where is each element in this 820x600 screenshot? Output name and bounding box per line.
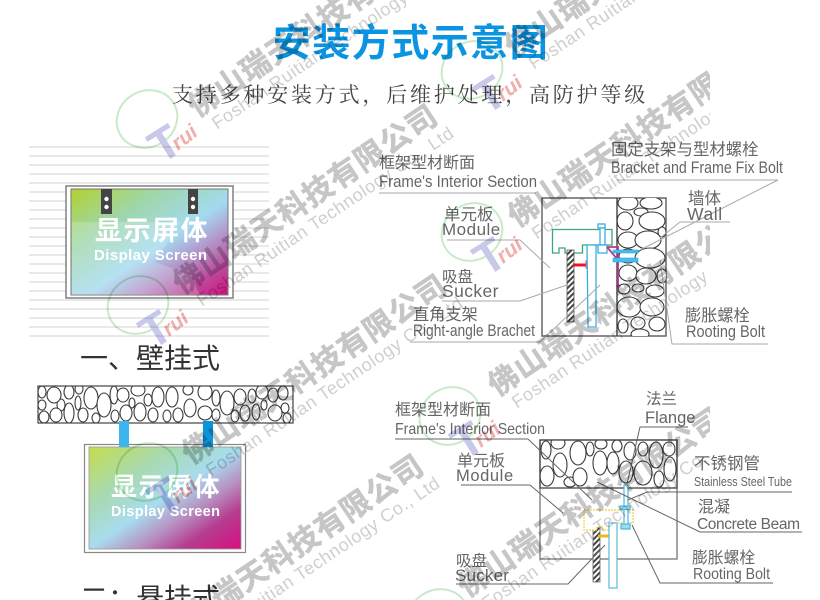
screen label: 显示屏体: [95, 216, 209, 246]
label: module: 单元板: [444, 205, 494, 224]
logo watermark: rui: [167, 120, 203, 155]
diagram labels: wall section: [379, 141, 783, 344]
label: bracket bolt: 固定支架与型材螺栓: [611, 141, 759, 159]
bolt: [598, 224, 607, 253]
watermark line: 佛山瑞天科技有限公司: [482, 201, 760, 403]
hanging bracket left: [119, 421, 129, 447]
label: sucker: 吸盘: [456, 551, 487, 570]
label: frame interior section: [395, 401, 592, 500]
screen frame: [66, 186, 233, 298]
screen label: [94, 216, 209, 264]
screen label: [111, 472, 221, 520]
concrete stones: [540, 437, 676, 487]
watermark layer: [106, 0, 710, 600]
label: stainless steel tube: Stainless Steel Tube: [694, 475, 792, 489]
logo watermark: T: [130, 300, 181, 359]
logo watermark: [440, 40, 522, 110]
label: right-angle bracket: Right-angle Brachet: [413, 322, 535, 340]
display screen: [89, 447, 241, 549]
label: stainless steel tube: 不锈钢管: [694, 454, 760, 473]
label: frame interior section: Frame's Interior Section: [379, 172, 537, 191]
aluminium tube: [609, 523, 617, 588]
label: bracket bolt: Bracket and Frame Fix Bolt: [611, 158, 783, 177]
label: wall: Wall: [687, 204, 723, 224]
label: flange: 法兰: [646, 390, 677, 408]
hanger frame: [84, 444, 246, 552]
diagram: ceiling section: [540, 437, 677, 588]
screen label: 显示屏体: [111, 472, 221, 502]
label: flange: [627, 390, 695, 484]
label: wall: 墙体: [688, 189, 722, 208]
hatched sucker strip: [567, 250, 574, 322]
label: sucker: [455, 545, 605, 585]
hanging bracket right: [203, 421, 213, 447]
label: rooting bolt: 膨胀螺栓: [685, 307, 750, 325]
label: frame interior section: Frame's Interior Section: [395, 421, 545, 438]
logo watermark: T: [464, 227, 515, 286]
hatched sucker strip: [593, 527, 600, 582]
watermark line: 佛山瑞天科技有限公司: [452, 402, 730, 600]
wall divider: [616, 198, 618, 336]
panel: hanging illustration: [38, 384, 293, 552]
stainless tube: [620, 485, 630, 529]
subtitle: 支持多种安装方式，后维护处理，高防护等级: [172, 83, 648, 108]
screen label: Display Screen: [111, 504, 220, 520]
sucker: [573, 261, 591, 268]
label: module: Module: [442, 220, 501, 239]
label: module: 单元板: [457, 452, 505, 470]
display screen: [71, 189, 228, 295]
logo watermark: T: [139, 467, 190, 526]
heading: wall mount: 一、壁挂式: [80, 343, 220, 374]
watermark line: 佛山瑞天科技有限公司: [176, 269, 454, 471]
label: right-angle bracket: 直角支架: [413, 306, 478, 324]
label: module: Module: [456, 467, 514, 485]
diagram: wall section: [542, 196, 667, 339]
label: frame interior section: 框架型材断面: [395, 401, 491, 419]
label: wall: [660, 189, 730, 238]
label: concrete beam: 混凝: [698, 498, 730, 516]
concrete outline: [540, 440, 677, 488]
watermark line: [508, 70, 710, 239]
logo watermark: rui: [492, 71, 528, 106]
watermark line: Foshan Ruitian Technology Co., Ltd: [193, 123, 457, 310]
label: rooting bolt: Rooting Bolt: [693, 566, 770, 583]
logo watermark: T: [442, 411, 493, 470]
diagram labels: ceiling section: [395, 390, 802, 585]
label: rooting bolt: 膨胀螺栓: [692, 549, 755, 567]
frame profile: [552, 230, 612, 253]
hanger right: [188, 189, 198, 214]
label: rooting bolt: [660, 260, 768, 344]
brick wall stripes: [29, 147, 269, 336]
pale overlay: [72, 222, 200, 295]
label: frame interior section: [379, 154, 537, 193]
label: bracket bolt: [611, 141, 783, 250]
section box: [540, 440, 677, 559]
label: stainless steel tube: [628, 454, 792, 500]
label: sucker: 吸盘: [442, 267, 473, 286]
label: rooting bolt: Rooting Bolt: [686, 323, 765, 341]
logo watermark: [440, 202, 522, 272]
hanger left: [101, 189, 112, 214]
logo watermark: rui: [158, 306, 194, 341]
watermark line: Foshan Ruitian Technology Co., Ltd: [508, 225, 772, 412]
ceiling outline: [38, 386, 293, 423]
aluminium tube: [587, 245, 596, 327]
label: concrete beam: Concrete Beam: [697, 516, 800, 533]
aluminium profile: [584, 510, 633, 530]
logo watermark: T: [139, 114, 190, 173]
logo watermark: [116, 442, 197, 512]
title: 安装方式示意图: [273, 23, 549, 65]
frame section box: [542, 198, 666, 336]
logo watermark: rui: [470, 417, 506, 452]
label: sucker: [442, 267, 567, 301]
logo watermark: T: [464, 65, 515, 124]
label: flange: Flange: [645, 409, 695, 427]
watermark line: Foshan Ruitian Technology Co., Ltd: [202, 293, 466, 480]
logo watermark: [106, 275, 188, 345]
logo watermark: rui: [492, 233, 528, 268]
screen label: Display Screen: [94, 247, 207, 264]
label: rooting bolt: [632, 525, 773, 583]
watermark line: [488, 224, 710, 408]
logo watermark: rui: [167, 473, 203, 508]
ceiling stones: [38, 384, 293, 423]
label: module: [456, 452, 563, 513]
label: right-angle bracket: [410, 285, 600, 342]
sucker: [598, 534, 613, 538]
watermark line: 佛山瑞天科技有限公司: [167, 99, 445, 301]
panel: wall-mounted illustration: [29, 147, 269, 336]
logo watermark: [116, 89, 197, 159]
label: module: [442, 205, 550, 268]
logo watermark: [418, 386, 500, 456]
logo watermark: [414, 588, 464, 600]
label: concrete beam: [597, 482, 802, 533]
label: sucker: Sucker: [455, 566, 509, 585]
label: sucker: Sucker: [442, 281, 499, 301]
expansion bolts: [613, 250, 638, 262]
watermark line: 佛山瑞天科技有限公司: [502, 32, 780, 234]
label: frame interior section: 框架型材断面: [379, 154, 475, 172]
angle bracket: [607, 247, 618, 290]
watermark line: Foshan Ruitian Technology Co., Ltd: [528, 56, 792, 243]
wall stones: [617, 196, 667, 339]
